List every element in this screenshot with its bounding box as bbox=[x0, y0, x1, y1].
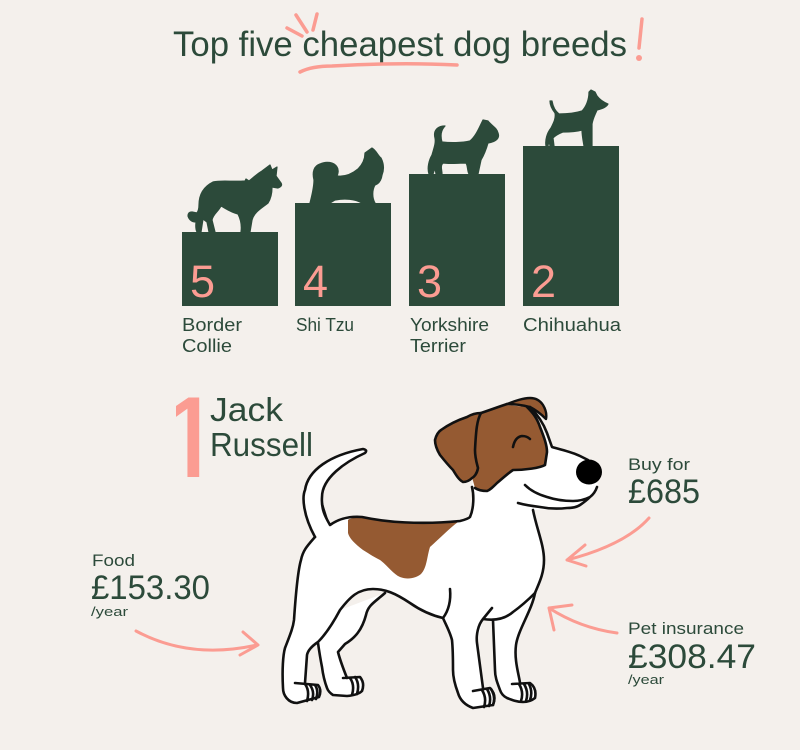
ear bbox=[435, 413, 481, 482]
eye bbox=[513, 436, 530, 447]
breed 5: Border Collie bbox=[182, 165, 282, 356]
breed 2: Chihuahua: 2 bbox=[531, 256, 556, 307]
callout: pet insurance cost: £308.47 bbox=[628, 638, 756, 676]
callout: buy price bbox=[628, 455, 700, 511]
rank 1 heading: Jack Russell bbox=[176, 397, 311, 477]
face outline bbox=[530, 407, 588, 460]
breed 3: Yorkshire Terrier: Yorkshire bbox=[410, 315, 489, 335]
illustration: Jack Russell dog bbox=[283, 398, 602, 708]
callout: food cost: Food bbox=[92, 551, 135, 570]
breed 4: Shi Tzu: Shi Tzu bbox=[296, 315, 354, 335]
icon: shi tzu silhouette bbox=[310, 148, 383, 203]
icon: border collie silhouette bbox=[188, 165, 282, 232]
tail patch bbox=[314, 503, 330, 530]
callout: pet insurance cost: Pet insurance bbox=[628, 619, 744, 638]
far hind leg bbox=[318, 593, 385, 696]
rank 1 heading: Jack Russell: Russell bbox=[210, 426, 313, 463]
far hind leg outline bbox=[318, 593, 385, 696]
nose bbox=[576, 460, 602, 484]
callout: food cost bbox=[91, 551, 210, 619]
breed 3: Yorkshire Terrier bbox=[409, 120, 505, 356]
breed 5: Border Collie: 5 bbox=[190, 256, 215, 307]
breed 4: Shi Tzu: 4 bbox=[303, 256, 328, 307]
back patch bbox=[348, 517, 458, 578]
breed 4: Shi Tzu bbox=[295, 148, 391, 335]
icon: yorkshire terrier silhouette bbox=[428, 120, 499, 174]
breed 3: Yorkshire Terrier: Terrier bbox=[410, 336, 466, 356]
chest and far front leg outline bbox=[493, 510, 544, 702]
callout: buy price: Buy for bbox=[628, 455, 690, 474]
belly and near front leg outline bbox=[283, 537, 535, 708]
rank 1 heading: Jack Russell: 1 bbox=[154, 370, 228, 518]
far front leg bbox=[493, 593, 535, 702]
smile lines bbox=[518, 485, 597, 509]
ear tip patch bbox=[507, 398, 546, 419]
arrow: buy price to dog bbox=[567, 518, 649, 566]
arrow: pet insurance to dog bbox=[549, 605, 617, 633]
breed 5: Border Collie: Collie bbox=[182, 336, 232, 356]
toes bbox=[305, 677, 531, 707]
arrow: food cost to dog bbox=[136, 631, 258, 655]
head patch outline bbox=[475, 404, 547, 491]
callout: food cost: /year bbox=[91, 604, 129, 619]
callout: buy price: £685 bbox=[628, 473, 700, 511]
title: Top five cheapest dog breeds bbox=[173, 25, 627, 64]
callout: pet insurance cost: /year bbox=[628, 672, 665, 687]
body outline bbox=[304, 449, 473, 537]
breed 5: Border Collie: Border bbox=[182, 315, 242, 335]
icon: chihuahua silhouette bbox=[546, 90, 608, 146]
breed 3: Yorkshire Terrier: 3 bbox=[417, 256, 442, 307]
head patch bbox=[470, 405, 547, 491]
rank 1 heading: Jack Russell: Jack bbox=[210, 391, 284, 428]
callout: pet insurance cost bbox=[628, 619, 756, 687]
callout: food cost: £153.30 bbox=[91, 569, 210, 607]
title bbox=[173, 14, 642, 72]
breed 2: Chihuahua: Chihuahua bbox=[523, 315, 622, 335]
chest line bbox=[443, 589, 450, 618]
breed 2: Chihuahua bbox=[523, 90, 622, 335]
body silhouette bbox=[283, 408, 598, 708]
